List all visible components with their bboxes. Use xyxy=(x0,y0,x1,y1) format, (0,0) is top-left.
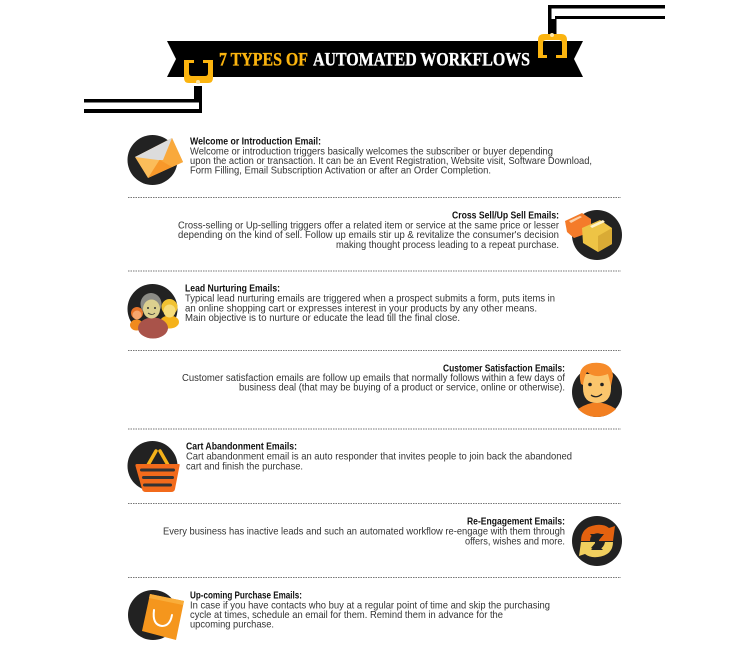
icon: left yellow clip xyxy=(184,60,213,84)
icon: shopping basket xyxy=(128,441,180,492)
connector: right cable xyxy=(548,5,665,34)
heading: Lead Nurturing Emails: xyxy=(185,282,280,294)
body text: Form Filling, Email Subscription Activation or after an Order Completion. xyxy=(190,164,491,176)
body text xyxy=(178,220,559,251)
heading: Re-Engagement Emails: xyxy=(467,516,565,528)
body text: upon the action or transaction. It can be an Event Registration, Website visit, Software Download, xyxy=(190,155,592,167)
body text: upcoming purchase. xyxy=(190,618,274,630)
heading: Cart Abandonment Emails: xyxy=(186,440,297,452)
icon: refresh arrows xyxy=(572,516,622,566)
icon: envelope xyxy=(128,135,183,185)
icon: boxes xyxy=(565,210,622,260)
body text: Customer satisfaction emails are follow up emails that normally follows within a few days of xyxy=(182,372,565,384)
connector: left cable xyxy=(84,86,202,113)
body text: Cart abandonment email is an auto responder that invites people to join back the abandoned xyxy=(186,450,572,462)
icon: smiling customer xyxy=(572,363,622,417)
body text: business deal (that may be buying of a product or service, online or otherwise). xyxy=(239,382,565,394)
panel: customer satisfaction xyxy=(182,362,622,417)
body text xyxy=(190,146,592,176)
panel: lead nurturing xyxy=(128,282,555,338)
body text xyxy=(190,600,550,630)
body text: Main objective is to nurture or educate the lead till the final close. xyxy=(185,312,460,324)
body text: making thought process leading to a repeat purchase. xyxy=(336,239,559,251)
icon: three people xyxy=(128,284,179,338)
title banner: AUTOMATED WORKFLOWS xyxy=(313,50,530,71)
body text xyxy=(163,526,565,548)
heading: Welcome or Introduction Email: xyxy=(190,136,321,148)
body text: In case if you have contacts who buy at a regular point of time and skip the purchasing xyxy=(190,600,550,612)
icon: shopping bag xyxy=(128,590,184,640)
body text: offers, wishes and more. xyxy=(465,536,565,548)
body text xyxy=(182,372,565,394)
panel: up-coming purchase xyxy=(128,590,550,640)
body text: an online shopping cart or expresses interest in your products by any other means. xyxy=(185,302,537,314)
heading: Up-coming Purchase Emails: xyxy=(190,590,302,602)
body text: Typical lead nurturing emails are triggered when a prospect submits a form, puts items in xyxy=(185,292,555,304)
title banner xyxy=(167,41,583,77)
panel: welcome email xyxy=(128,135,592,185)
panel: cart abandonment xyxy=(128,440,572,492)
body text xyxy=(185,292,555,324)
title banner: 7 TYPES OF xyxy=(219,50,308,71)
body text xyxy=(186,450,572,472)
body text: Every business has inactive leads and such an automated workflow re-engage with them through xyxy=(163,526,565,538)
body text: Welcome or introduction triggers basically welcomes the subscriber or buyer depending xyxy=(190,146,553,158)
panel: cross sell / up sell xyxy=(178,210,622,260)
body text: depending on the kind of sell. Follow up emails stir up & revitalize the consumer's decision xyxy=(178,229,559,241)
heading: Cross Sell/Up Sell Emails: xyxy=(452,210,559,222)
icon: right yellow clip xyxy=(538,33,567,58)
panel: re-engagement xyxy=(163,516,622,566)
heading: Customer Satisfaction Emails: xyxy=(443,362,565,374)
body text: Cross-selling or Up-selling triggers offer a related item or service at the same price or lesser xyxy=(178,220,559,232)
body text: cart and finish the purchase. xyxy=(186,460,303,472)
body text: cycle at times, schedule an email for them. Remind them in advance for the xyxy=(190,609,503,621)
